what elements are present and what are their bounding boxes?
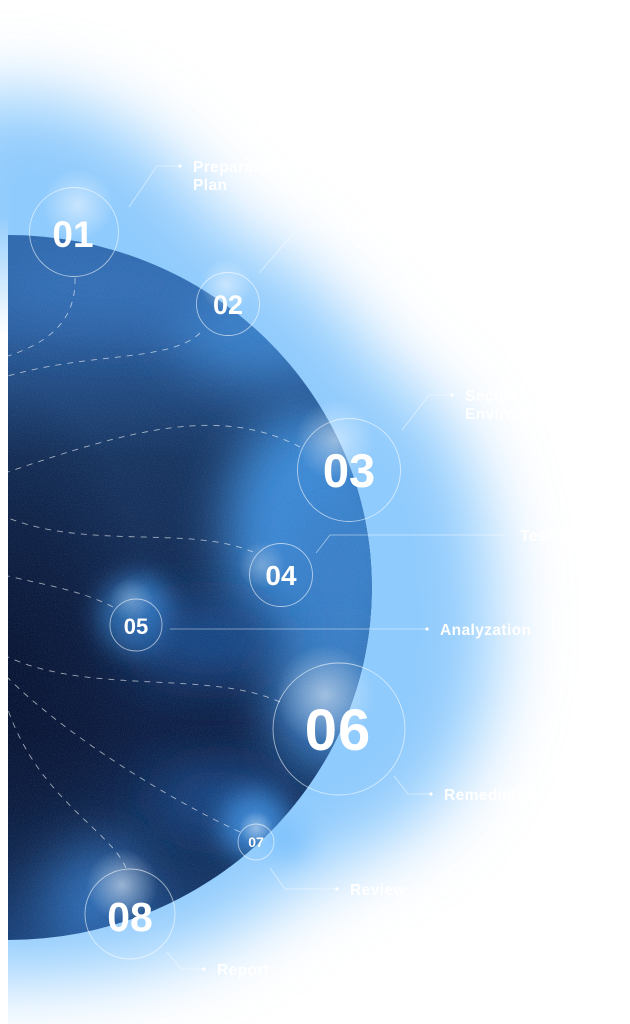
step 07: 07 (248, 834, 264, 850)
blue semicircle (8, 235, 372, 940)
step 01: 01 (52, 214, 94, 255)
left margin strip (0, 215, 8, 1024)
step 05 (109, 578, 531, 651)
step 02: 02 (213, 290, 243, 320)
step 04: 04 (265, 560, 297, 591)
step 03: Secure (465, 388, 519, 405)
step 03 (295, 388, 564, 522)
step 01 (30, 159, 284, 276)
step 06: Remediation (444, 787, 541, 804)
step 08: 08 (107, 894, 153, 940)
step 03: Environment (465, 406, 564, 423)
step 06: 06 (305, 698, 371, 763)
step 05: Analyzation (440, 622, 531, 639)
step 04: Testing (520, 528, 577, 545)
step 05: 05 (124, 614, 148, 639)
step 08 (85, 849, 269, 979)
semicircle grain (8, 235, 373, 940)
step 01: Plan (193, 177, 227, 194)
step 02: Discovery (345, 219, 423, 236)
step 07 (238, 811, 406, 899)
dashed connectors (8, 278, 300, 868)
semicircle inner light (0, 245, 400, 950)
step 07: Review (350, 882, 406, 899)
step 02 (196, 219, 423, 336)
step 06 (273, 645, 541, 804)
left edge shade (8, 418, 142, 928)
step 03: 03 (323, 444, 375, 497)
background glow (0, 95, 494, 979)
step 01: Preparation (193, 159, 284, 176)
step 04 (238, 528, 577, 606)
step 08: Report (217, 962, 269, 979)
